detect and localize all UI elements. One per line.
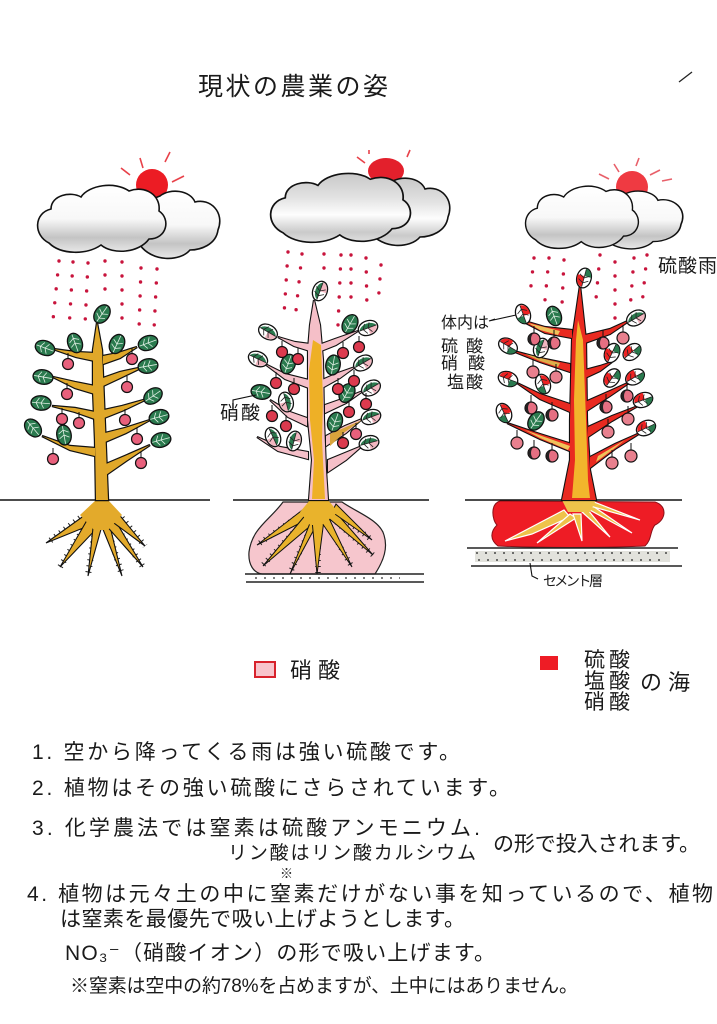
corner pen mark: [679, 72, 692, 82]
item 3: 3. 化学農法では窒素は硫酸アンモニウム.: [32, 817, 480, 840]
panel: tree 1, healthy-looking tree under sulfuric rain: [0, 152, 220, 576]
roots: [505, 500, 640, 543]
fruit: [511, 325, 637, 469]
item 4: ※窒素は空中の約78%を占めますが、土中にはありません。: [70, 975, 578, 997]
rain drops: [52, 261, 157, 330]
callout: acids inside the plant body: 塩酸: [447, 373, 483, 392]
icon: cloud: [526, 186, 683, 249]
rain drops: [530, 255, 647, 320]
ground line: [0, 499, 210, 501]
legend: sea of sulfuric, hydrochloric and nitric acids: 塩酸: [584, 670, 630, 693]
rain label: 硫酸雨: [658, 255, 717, 277]
callout: acids inside the plant body: [441, 314, 516, 392]
legend: nitric acid: [255, 658, 340, 683]
legend: sea of sulfuric, hydrochloric and nitric acids: 硝酸: [584, 691, 630, 714]
item 3: ※: [280, 866, 293, 881]
panel: tree 2, nitric acid accumulates: [220, 150, 450, 582]
icon: sun with rays: [121, 152, 184, 201]
nitric acid pool in soil: [249, 502, 386, 574]
legend: nitric acid: 硝酸: [290, 658, 340, 683]
ground line: [233, 499, 429, 501]
icon: sun with rays: [357, 150, 410, 184]
callout: cement layer: セメント層: [543, 573, 603, 589]
icon: sun with rays: [599, 158, 672, 203]
leaves: [21, 302, 173, 450]
callout: acids inside the plant body: 体内は: [441, 314, 489, 332]
rain drops: [284, 252, 381, 325]
fruit: [48, 348, 146, 468]
callout: acids inside the plant body: 硝酸: [441, 354, 485, 373]
sea of acids in soil: [492, 501, 664, 548]
ground line: [465, 499, 682, 501]
item 3: [32, 817, 700, 881]
leaves: [493, 266, 658, 439]
item 2: 2. 植物はその強い硫酸にさらされています。: [32, 777, 510, 800]
tree trunk and branches: [257, 300, 363, 500]
icon: cloud: [38, 185, 220, 258]
legend: sea of sulfuric, hydrochloric and nitric acids: の海: [640, 670, 690, 695]
legend: sea of sulfuric, hydrochloric and nitric acids: [540, 649, 690, 714]
callout: acids inside the plant body: 硫酸: [441, 337, 483, 356]
roots: [46, 500, 145, 576]
tree trunk and branches: [507, 285, 642, 500]
item 4: 4. 植物は元々土の中に窒素だけがない事を知っているので、植物: [27, 883, 713, 906]
cement layer: [245, 574, 424, 582]
item 3: リン酸はリン酸カルシウム: [228, 842, 476, 864]
tree trunk and branches: [42, 323, 150, 500]
item 4: は窒素を最優先で吸い上げようとします。: [60, 908, 465, 931]
callout: nitric acid in leaf: 硝酸: [220, 402, 260, 424]
roots: [257, 500, 373, 574]
icon: cloud: [271, 173, 450, 245]
item 1: 1. 空から降ってくる雨は強い硫酸です。: [32, 741, 460, 764]
panel: tree 3, sea of acids above cement layer: [441, 158, 717, 589]
leaves: [246, 279, 383, 453]
fruit: [266, 336, 372, 448]
title: 現状の農業の姿: [198, 73, 388, 101]
cement layer: [467, 548, 682, 566]
item 4: NO₃⁻（硝酸イオン）の形で吸い上げます。: [65, 942, 495, 965]
callout: cement layer: [530, 563, 603, 589]
text block: numbered explanation: [27, 741, 713, 997]
item 4: [27, 883, 713, 997]
legend: sea of sulfuric, hydrochloric and nitric acids: 硫酸: [584, 649, 630, 672]
item 3: の形で投入されます。: [493, 833, 700, 856]
